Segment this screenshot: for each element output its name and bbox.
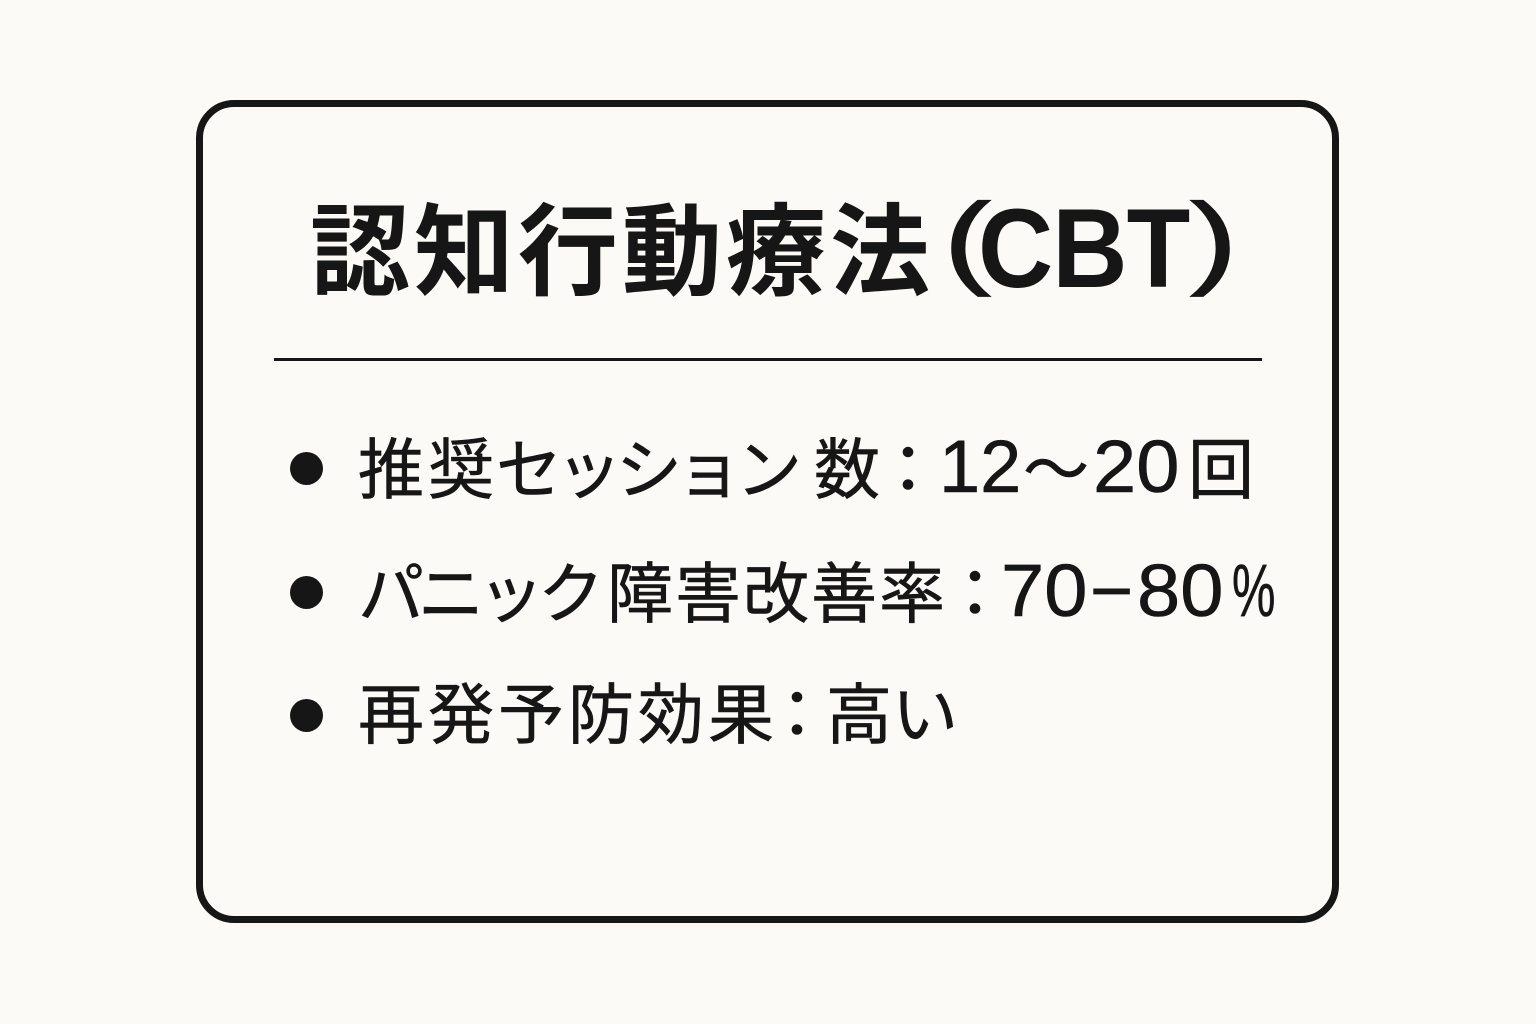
text: panic disorder improvement rate xyxy=(358,549,1275,632)
text: relapse prevention effect: ： xyxy=(764,678,830,752)
title xyxy=(310,182,1238,311)
text: panic disorder improvement rate: − xyxy=(1090,549,1133,632)
text: recommended sessions: 20 xyxy=(1093,425,1179,508)
text: panic disorder improvement rate: パニック xyxy=(358,557,598,631)
title: CBT xyxy=(978,186,1189,311)
text: panic disorder improvement rate: 80 xyxy=(1137,549,1223,632)
text: recommended sessions: 数 xyxy=(814,433,880,507)
text: recommended sessions: ～ xyxy=(1023,433,1089,507)
text: panic disorder improvement rate: 70 xyxy=(1001,549,1087,632)
bullet 3 xyxy=(290,699,323,732)
divider under title xyxy=(274,358,1262,361)
text: recommended sessions: 12 xyxy=(939,425,1021,508)
title: ) xyxy=(1190,182,1238,297)
text: relapse prevention effect: 高い xyxy=(826,678,958,752)
text: recommended sessions: ： xyxy=(875,433,941,507)
title: 認知行動療法 xyxy=(310,197,934,309)
bullet 2 xyxy=(290,576,323,609)
bullet 1 xyxy=(290,452,323,485)
text: panic disorder improvement rate: 障害改善率 xyxy=(607,557,947,631)
text: recommended sessions: セッション xyxy=(496,433,796,507)
text: panic disorder improvement rate: ： xyxy=(942,557,1008,631)
text: panic disorder improvement rate: % xyxy=(1232,549,1275,632)
text: relapse prevention effect: 再発予防効果 xyxy=(358,678,778,752)
text: recommended sessions: 回 xyxy=(1188,433,1254,507)
text: recommended sessions xyxy=(358,425,1254,508)
panel: CBT card xyxy=(196,100,1339,923)
title: ( xyxy=(943,182,991,297)
text: recommended sessions: 推奨 xyxy=(358,433,498,507)
